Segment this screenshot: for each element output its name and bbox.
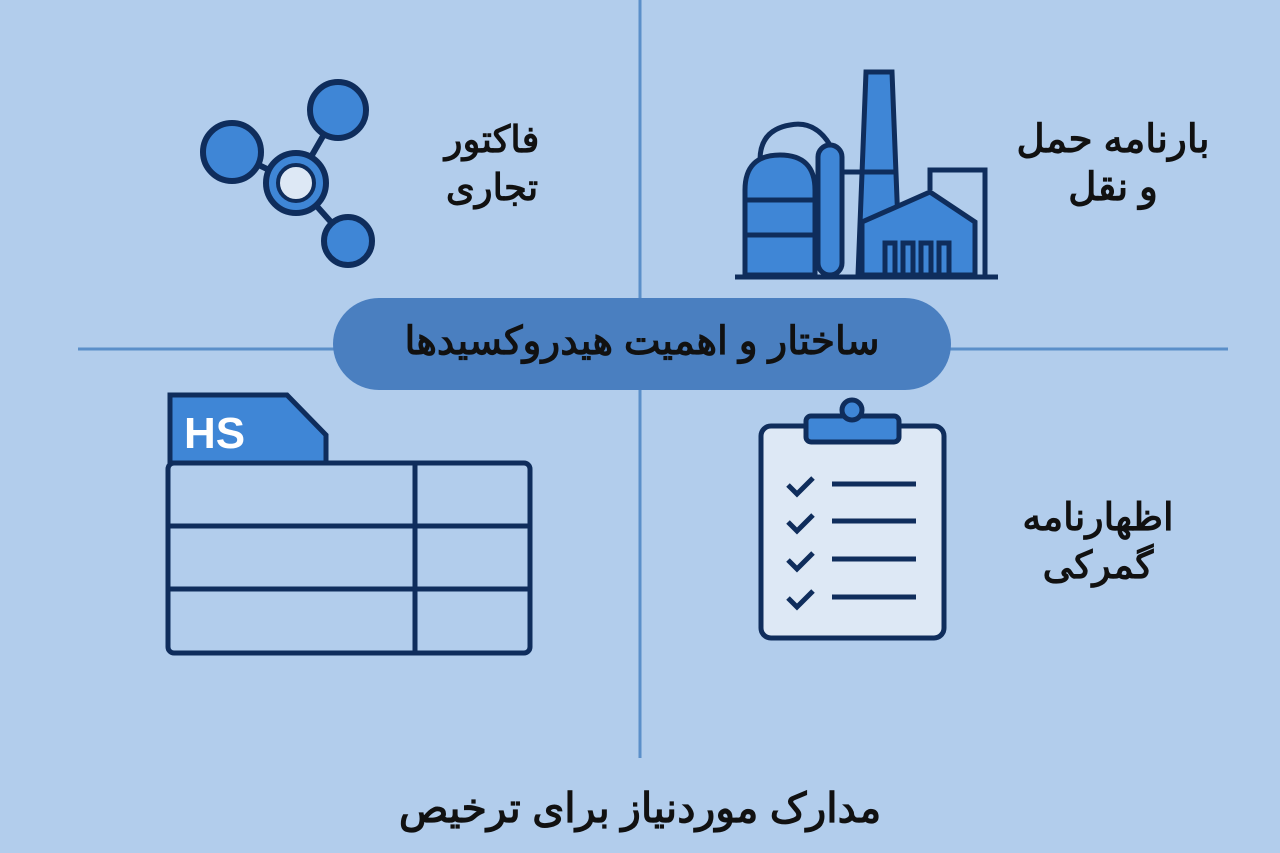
label: invoice: تجاری bbox=[446, 167, 538, 208]
label: bill of lading bbox=[1016, 118, 1210, 210]
label: customs declaration: گمرکی bbox=[1043, 545, 1153, 587]
icon: molecule bbox=[203, 82, 372, 265]
label: invoice bbox=[442, 119, 539, 210]
icon: HS table bbox=[168, 395, 530, 653]
label: invoice: فاکتور bbox=[445, 119, 539, 160]
icon: clipboard bbox=[761, 400, 944, 638]
heading: center title: ساختار و اهمیت هیدروکسیدها bbox=[404, 320, 880, 363]
label: customs declaration bbox=[1022, 497, 1174, 588]
center pill bbox=[333, 298, 951, 390]
label: customs declaration: اظهارنامه bbox=[1022, 497, 1174, 539]
footer title: مدارک موردنیاز برای ترخیص bbox=[399, 785, 881, 831]
icon: factory bbox=[735, 72, 998, 277]
label: bill of lading: بارنامه حمل bbox=[1016, 118, 1210, 161]
label: bill of lading: و نقل bbox=[1068, 166, 1158, 209]
icon: HS table: HS bbox=[184, 409, 245, 458]
